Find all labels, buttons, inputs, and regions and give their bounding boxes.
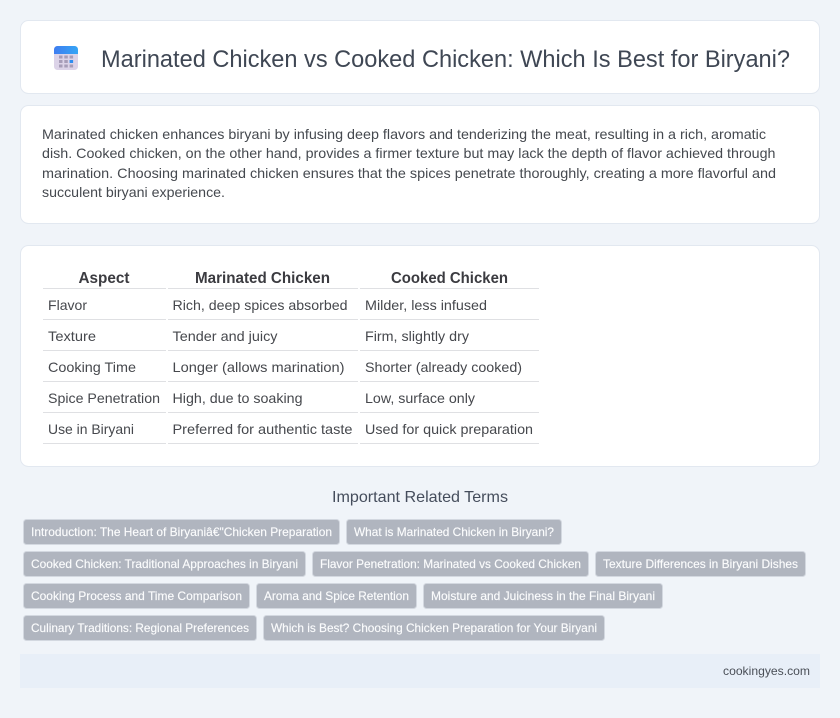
intro paragraph — [42, 126, 776, 200]
tag: Which is Best? Choosing Chicken Preparation for Your Biryani — [271, 621, 597, 635]
table header: Cooked Chicken — [391, 270, 508, 287]
row: use in biryani — [48, 421, 533, 437]
title panel — [20, 20, 820, 94]
row: cooking time — [48, 359, 522, 375]
row: use in biryani: Used for quick preparation — [365, 421, 533, 437]
table header — [78, 270, 508, 287]
row: flavor: Rich, deep spices absorbed — [172, 297, 348, 313]
row: spice penetration: Low, surface only — [365, 390, 475, 406]
tag — [596, 552, 806, 576]
panel: comparison table — [20, 246, 820, 466]
title: Marinated Chicken vs Cooked Chicken: Which Is Best for Biryani? — [101, 46, 790, 73]
tag — [24, 616, 256, 640]
table rules — [43, 288, 539, 444]
intro paragraph: marination. Choosing marinated chicken ensures that the spices penetrate thoroughly, creating a more flavorful and — [42, 165, 776, 181]
tag — [312, 552, 588, 576]
intro paragraph: succulent biryani experience. — [42, 184, 225, 200]
row: flavor — [48, 297, 487, 313]
row: texture — [48, 328, 469, 344]
row: use in biryani: Preferred for authentic taste — [172, 421, 353, 437]
row: flavor: Flavor — [48, 297, 87, 313]
tag: Culinary Traditions: Regional Preferences — [31, 621, 249, 635]
row: cooking time: Longer (allows marination) — [172, 359, 344, 375]
row: texture: Texture — [48, 328, 96, 344]
tag: Cooked Chicken: Traditional Approaches in Biryani — [31, 557, 298, 571]
icon: calendar — [54, 46, 78, 70]
panel: introduction — [20, 106, 820, 224]
tag: Moisture and Juiciness in the Final Biryani — [431, 589, 655, 603]
row: use in biryani: Use in Biryani — [48, 421, 134, 437]
tag: Aroma and Spice Retention — [264, 589, 409, 603]
row: spice penetration: High, due to soaking — [172, 390, 302, 406]
table header: Marinated Chicken — [195, 270, 330, 287]
row: spice penetration: Spice Penetration — [48, 390, 160, 406]
heading: important related terms: Important Related Terms — [332, 489, 508, 506]
tag — [24, 552, 306, 576]
tag — [424, 584, 662, 608]
tag — [264, 616, 604, 640]
tag: Flavor Penetration: Marinated vs Cooked Chicken — [320, 557, 581, 571]
tag — [256, 584, 416, 608]
intro paragraph: dish. Cooked chicken, on the other hand, provides a firmer texture but may lack the depth of flavor achieved through — [42, 145, 776, 161]
row: cooking time: Cooking Time — [48, 359, 136, 375]
footer source text: cookingyes.com — [723, 664, 810, 678]
related term tags — [24, 520, 806, 640]
row: spice penetration — [48, 390, 475, 406]
tag: Texture Differences in Biryani Dishes — [603, 557, 798, 571]
footer — [20, 654, 820, 688]
tag: Introduction: The Heart of Biryaniâ€"Chicken Preparation — [31, 525, 332, 539]
tag — [346, 520, 562, 544]
row: cooking time: Shorter (already cooked) — [365, 359, 522, 375]
row: texture: Firm, slightly dry — [365, 328, 469, 344]
row: texture: Tender and juicy — [172, 328, 278, 344]
tag — [24, 584, 250, 608]
intro paragraph: Marinated chicken enhances biryani by infusing deep flavors and tenderizing the meat, resulting in a rich, aromatic — [42, 126, 766, 142]
tag: Cooking Process and Time Comparison — [31, 589, 242, 603]
tag: What is Marinated Chicken in Biryani? — [354, 525, 554, 539]
table header: Aspect — [78, 270, 130, 287]
tag — [24, 520, 340, 544]
row: flavor: Milder, less infused — [365, 297, 487, 313]
